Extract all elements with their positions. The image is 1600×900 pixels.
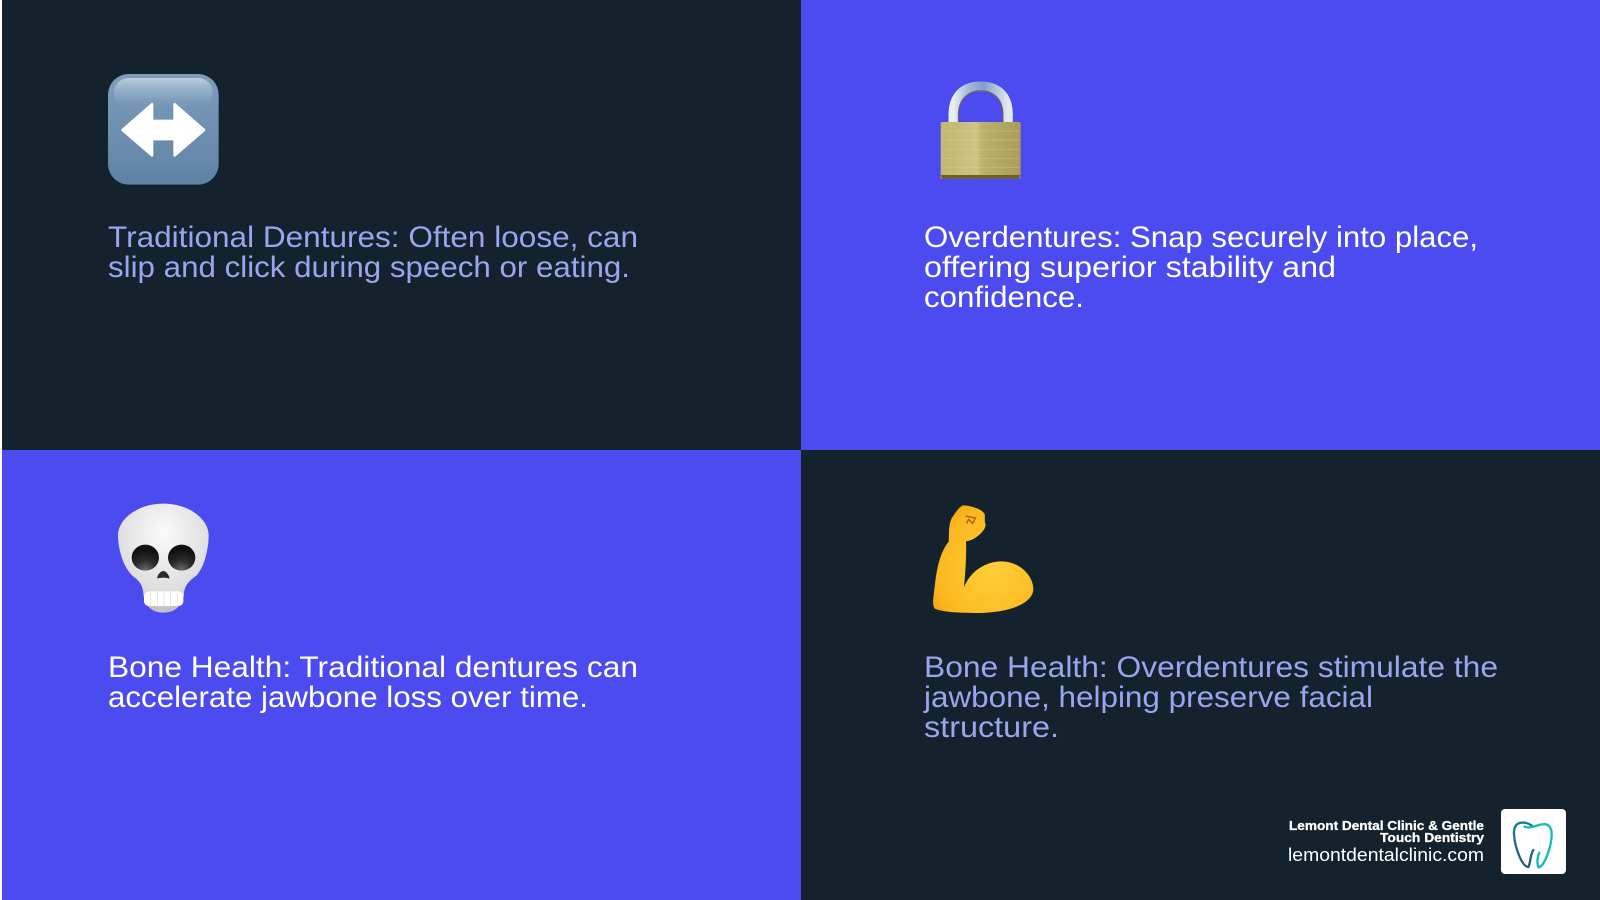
text: traditional dentures: Traditional Dentures: Often loose, can [108, 221, 638, 254]
text: overdentures: offering superior stability and [924, 251, 1336, 284]
text: bone health overdentures: Bone Health: Overdentures stimulate the [924, 651, 1498, 684]
text: traditional dentures: slip and click during speech or eating. [108, 251, 630, 284]
text: bone health overdentures: jawbone, helping preserve facial [923, 681, 1373, 714]
brand: clinic name and url: Touch Dentistry [1380, 830, 1485, 845]
text: bone health overdentures: structure. [924, 711, 1059, 744]
text: bone health traditional: accelerate jawbone loss over time. [108, 681, 588, 714]
text: overdentures: Overdentures: Snap securely into place, [924, 221, 1478, 254]
text: overdentures: confidence. [924, 281, 1084, 314]
brand: tooth logo [1501, 809, 1566, 874]
panel: overdentures bone health [801, 450, 1600, 900]
icon: flexed biceps [933, 505, 1033, 613]
brand: clinic name and url: Lemont Dental Clinic & Gentle [1289, 818, 1484, 833]
brand: clinic name and url: lemontdentalclinic.com [1288, 845, 1484, 865]
text: bone health traditional: Bone Health: Traditional dentures can [108, 651, 638, 684]
icon: padlock [941, 86, 1021, 179]
icon: left-right arrow [108, 74, 219, 185]
panel: overdentures stability [801, 0, 1600, 450]
icon: skull [118, 504, 209, 613]
panel: traditional dentures stability [2, 0, 801, 450]
panel: traditional dentures bone health [2, 450, 801, 900]
brand: clinic name and url [1288, 818, 1485, 865]
